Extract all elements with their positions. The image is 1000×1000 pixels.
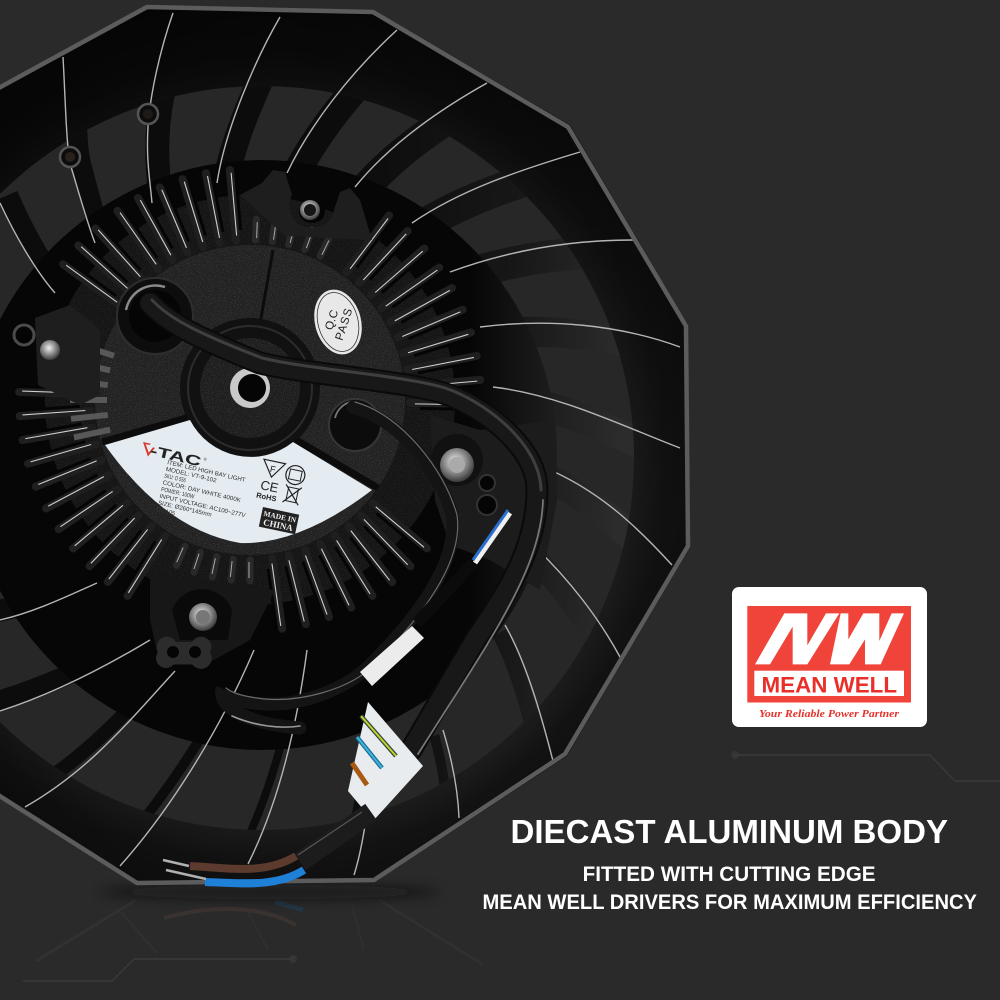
label specification text: POWER: 100W [160,487,195,501]
high bay lamp [0,5,694,888]
driver plate [95,245,405,555]
cable gland: small [329,399,381,451]
lamp openings [0,86,634,830]
mounting ear: bottom [150,575,275,669]
QC pass sticker [307,284,369,360]
MW letter mark [755,613,904,664]
second cable and loop [221,402,458,728]
circuit line: lower left [23,955,297,981]
made in china stamp: MADE IN [263,509,298,525]
certification icons: CE [259,477,280,496]
brown wire [163,856,296,869]
QC pass sticker: Q.C [323,309,341,332]
driver heat sink [19,169,481,629]
main power cable [150,300,543,754]
subtitle text: MEAN WELL DRIVERS FOR MAXIMUM EFFICIENCY [482,890,977,914]
label specification text: SIZE: Ø260*145mm [157,500,212,519]
QC pass sticker: PASS [334,306,356,342]
brand mark: -TAC [149,442,203,469]
cable gland: large [117,278,193,354]
lamp outer housing [0,5,690,885]
vane mounting holes [60,104,158,167]
cooling vane bodies [0,86,558,830]
central hub [102,318,378,488]
label specification text: COLOR: DAY WHITE 4000K [162,480,241,504]
central black disc [0,160,557,750]
title: DIECAST ALUMINUM BODY [510,814,948,851]
white connector with coloured wires [348,702,423,821]
heat shrink tube [298,812,371,862]
Mean Well logo [732,587,927,727]
made in china stamp [259,507,299,534]
Mean Well logo: MEAN WELL [762,673,897,698]
grey short fins: left [70,344,114,437]
label specification text: ITEM: LED HIGH BAY LIGHT [167,460,246,484]
label specification text: SKU: O 556 [163,474,187,484]
white tape [360,626,424,686]
certification icons: F [269,464,277,475]
made in china stamp: CHINA [262,517,294,533]
subtitle text [482,862,977,914]
certification icons: RoHS [255,491,277,504]
circuit line: upper right [731,751,1000,781]
certification icons [255,459,307,508]
mounting ear: right [430,415,557,590]
floor shadow [100,885,440,899]
product label [105,420,372,543]
lamp reflection [36,900,482,964]
blue and white wires [417,510,510,623]
label specification text: INPUT VOLTAGE: AC100~277V [159,494,246,519]
brand mark [140,440,208,470]
label specification text: 600105 [156,507,176,517]
rim edge [0,7,688,883]
Mean Well logo: Your Reliable Power Partner [759,709,900,720]
subtitle text: FITTED WITH CUTTING EDGE [583,862,876,886]
label specification text: MODEL: VT-9-102 [165,467,218,485]
label specification text [156,460,254,533]
brand mark: ® [203,456,207,462]
mounting ear: left [14,305,100,405]
vane bright edges [0,13,680,875]
blue wire [166,870,304,883]
mounting ear: top [240,170,372,240]
